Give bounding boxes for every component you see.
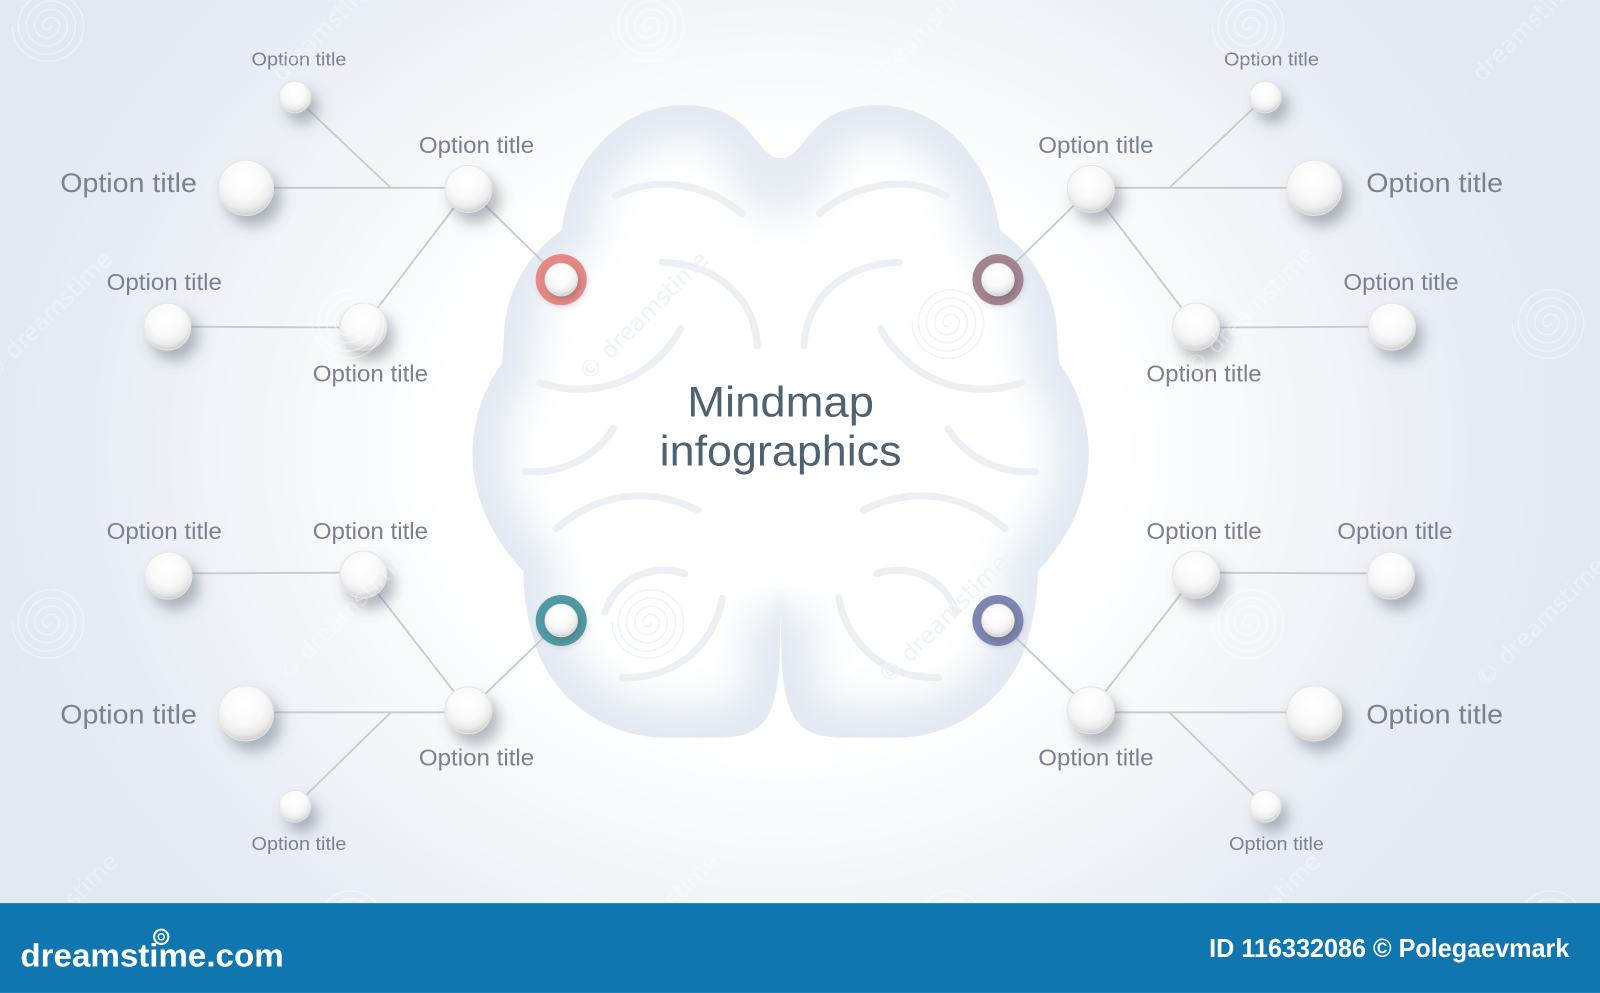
brain shape: © dreamstime bbox=[873, 548, 1014, 690]
branch: top left bbox=[60, 48, 534, 387]
branch: bottom left: Option title bbox=[252, 833, 346, 854]
branch: top left: Option title bbox=[419, 132, 534, 158]
brain shape bbox=[472, 105, 1089, 750]
branch: bottom left: Option title bbox=[107, 518, 222, 544]
center title bbox=[660, 378, 902, 475]
watermark pattern: © dreamstime bbox=[271, 546, 412, 687]
branch: bottom right: Option title bbox=[1038, 744, 1154, 770]
branch: bottom left: Option title bbox=[60, 700, 197, 730]
logo wordmark: dreamstime.com bbox=[20, 936, 284, 973]
hub: top left, red bbox=[536, 254, 587, 305]
branch: top right: Option title bbox=[1224, 48, 1319, 69]
branch: top right bbox=[1038, 48, 1503, 387]
footer banner bbox=[0, 903, 1600, 993]
branch: bottom right bbox=[1038, 518, 1503, 854]
watermark pattern: © dreamstime bbox=[1185, 847, 1326, 989]
branch: bottom left bbox=[60, 518, 534, 854]
branch: top left: Option title bbox=[252, 48, 346, 69]
branch: top left: Option title bbox=[60, 168, 197, 198]
branch: bottom right: Option title bbox=[1229, 833, 1324, 854]
hub: top right, mauve bbox=[972, 254, 1023, 305]
branch: top left: Option title bbox=[313, 361, 428, 387]
hub: bottom left, teal bbox=[536, 595, 587, 646]
branch: bottom right: Option title bbox=[1366, 700, 1503, 730]
branch: top right: Option title bbox=[1038, 132, 1154, 158]
branch: bottom right: Option title bbox=[1337, 518, 1453, 544]
center title: Mindmap bbox=[687, 378, 874, 426]
branch: bottom left: Option title bbox=[419, 744, 534, 770]
image credit: ID 116332086 © Polegaevmark bbox=[1209, 935, 1570, 963]
branch: bottom left: Option title bbox=[313, 518, 428, 544]
branch: bottom right: Option title bbox=[1146, 518, 1262, 544]
brain folds, left hemisphere bbox=[526, 184, 757, 678]
branch: top right: Option title bbox=[1366, 168, 1503, 198]
watermark pattern: © dreamstime bbox=[583, 847, 724, 989]
center title: infographics bbox=[660, 427, 902, 475]
hub: bottom right, indigo bbox=[972, 595, 1023, 646]
brain folds, right hemisphere bbox=[804, 184, 1036, 678]
watermark pattern: © dreamstime bbox=[1179, 240, 1320, 381]
branch: top left: Option title bbox=[107, 269, 222, 295]
branch: top right: Option title bbox=[1343, 269, 1459, 295]
connector lines bbox=[167, 97, 1392, 806]
branch: top right: Option title bbox=[1146, 361, 1262, 387]
brain shape: © dreamstime bbox=[573, 245, 714, 386]
